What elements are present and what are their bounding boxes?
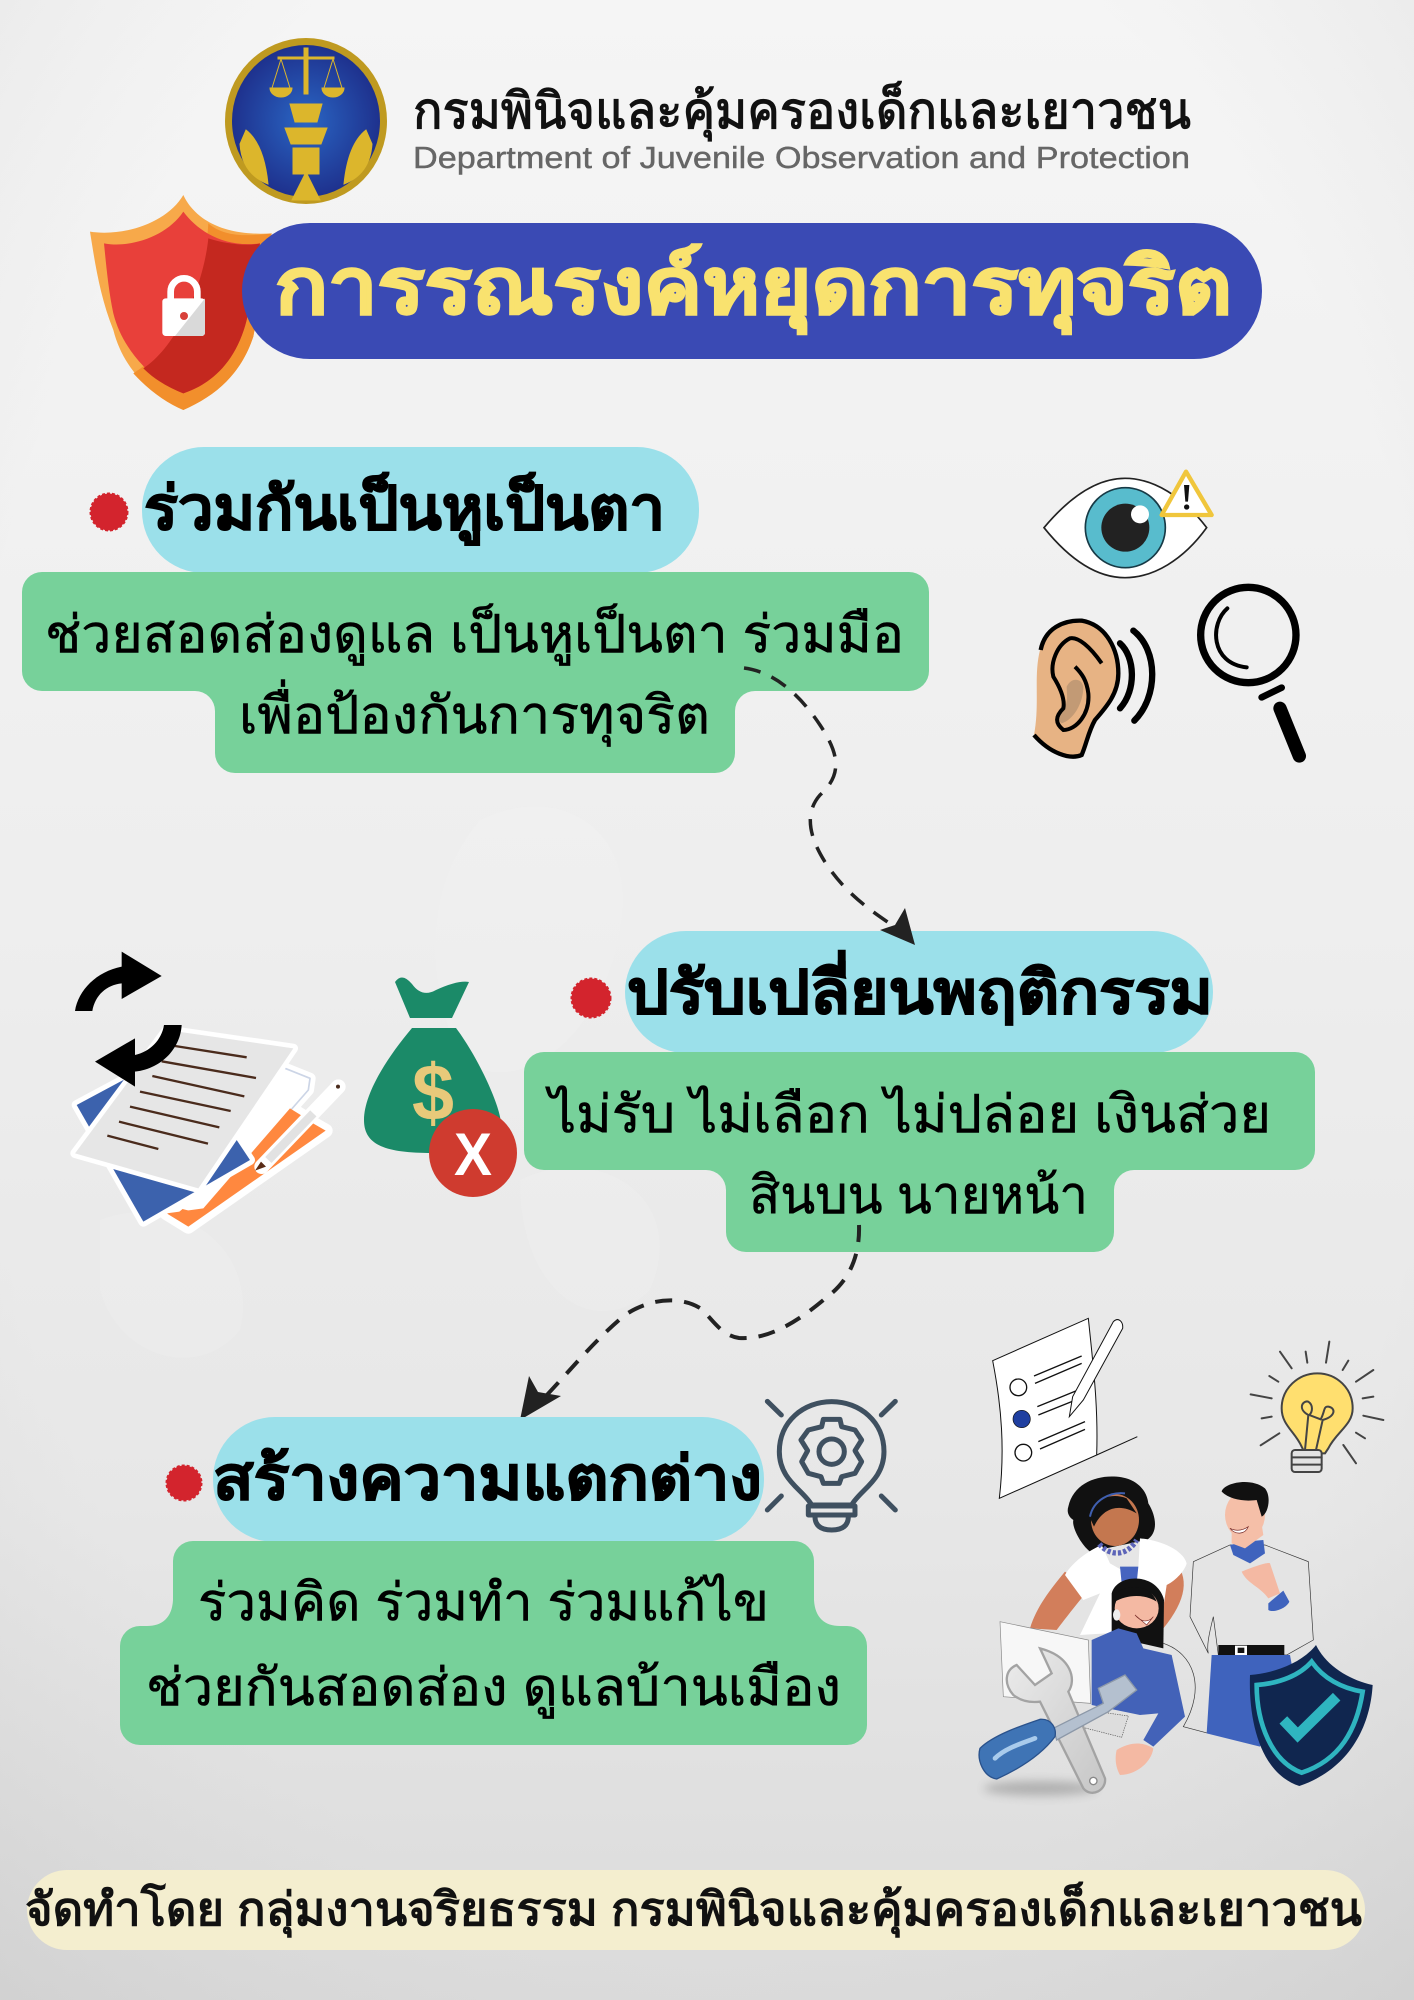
icon: light bulb with gear xyxy=(767,1401,895,1530)
person: standing woman xyxy=(1030,1476,1187,1635)
title banner: การรณรงค์หยุดการทุจริต xyxy=(275,244,1232,335)
section 2 description panel: สินบน นายหน้า xyxy=(749,1167,1088,1225)
bullet 3 xyxy=(166,1466,202,1500)
section 2 heading pill: ปรับเปลี่ยนพฤติกรรม xyxy=(627,950,1213,1026)
footer credit bar xyxy=(25,1870,1365,1950)
person: seated woman xyxy=(1092,1578,1208,1775)
icon group: papers with rotating arrows xyxy=(75,952,340,1227)
icon group: eye, ear and magnifier xyxy=(1034,472,1299,757)
icon: eye with warning xyxy=(1044,472,1212,578)
section 2 description panel: ไม่รับ ไม่เลือก ไม่ปล่อย เงินส่วย xyxy=(545,1085,1271,1144)
person: standing man xyxy=(1190,1482,1313,1747)
arrow: dashed from section 2 to section 3 xyxy=(520,1225,859,1420)
section 3 description panel xyxy=(120,1541,867,1745)
icon: pen xyxy=(255,1085,340,1171)
bullet 1 xyxy=(90,494,128,530)
section 1 heading pill xyxy=(90,447,699,573)
icon: wrench xyxy=(1007,1648,1105,1793)
section 1 heading pill: ร่วมกันเป็นหูเป็นตา xyxy=(144,472,665,546)
footer credit bar: จัดทำโดย กลุ่มงานจริยธรรม กรมพินิจและคุ้มครองเด็กและเยาวชน xyxy=(25,1881,1363,1938)
icon: navy shield with check xyxy=(1250,1645,1373,1786)
section 1 description panel xyxy=(22,572,929,773)
icon: blue sheet xyxy=(77,1080,250,1222)
section 3 description panel: ร่วมคิด ร่วมทำ ร่วมแก้ไข xyxy=(198,1573,769,1632)
icon: orange folder sheet xyxy=(167,1108,326,1227)
section 2 description panel xyxy=(524,1052,1315,1252)
section 2 heading pill xyxy=(572,931,1213,1053)
icon: rotating arrows xyxy=(75,952,182,1087)
icon: grey document with lines xyxy=(75,1030,293,1188)
tool shadow xyxy=(983,1781,1097,1796)
logo text: English department name: Department of Juvenile Observation and Protection xyxy=(413,140,1190,175)
arrow: dashed from section 1 to section 2 xyxy=(744,668,915,945)
logo emblem xyxy=(225,38,387,204)
bullet 2 xyxy=(572,978,610,1018)
monitor xyxy=(1000,1622,1091,1703)
section 3 description panel: ช่วยกันสอดส่อง ดูแลบ้านเมือง xyxy=(146,1659,841,1719)
icon: money bag with red x xyxy=(364,977,517,1197)
icon: red shield with lock xyxy=(90,195,272,410)
section 3 heading pill xyxy=(166,1417,764,1542)
section 3 heading pill: สร้างความแตกต่าง xyxy=(213,1445,762,1512)
icon: idea bulb xyxy=(1251,1342,1383,1472)
icon: money bag with red x: X xyxy=(454,1121,492,1188)
icon: magnifying glass xyxy=(1201,587,1299,756)
icon: ear with sound waves xyxy=(1034,621,1152,757)
illustration: team with tools, checklist, bulb and shield xyxy=(979,1318,1383,1796)
title banner xyxy=(242,223,1262,359)
logo text: Thai department name: กรมพินิจและคุ้มครองเด็กและเยาวชน xyxy=(413,81,1191,141)
icon: screwdriver xyxy=(979,1675,1137,1779)
icon: money bag with red x: $ xyxy=(412,1048,454,1137)
section 1 description panel: เพื่อป้องกันการทุจริต xyxy=(239,679,710,747)
keyboard xyxy=(1080,1711,1128,1737)
icon: checklist and pen xyxy=(993,1318,1137,1498)
section 1 description panel: ช่วยสอดส่องดูแล เป็นหูเป็นตา ร่วมมือ xyxy=(45,604,904,666)
